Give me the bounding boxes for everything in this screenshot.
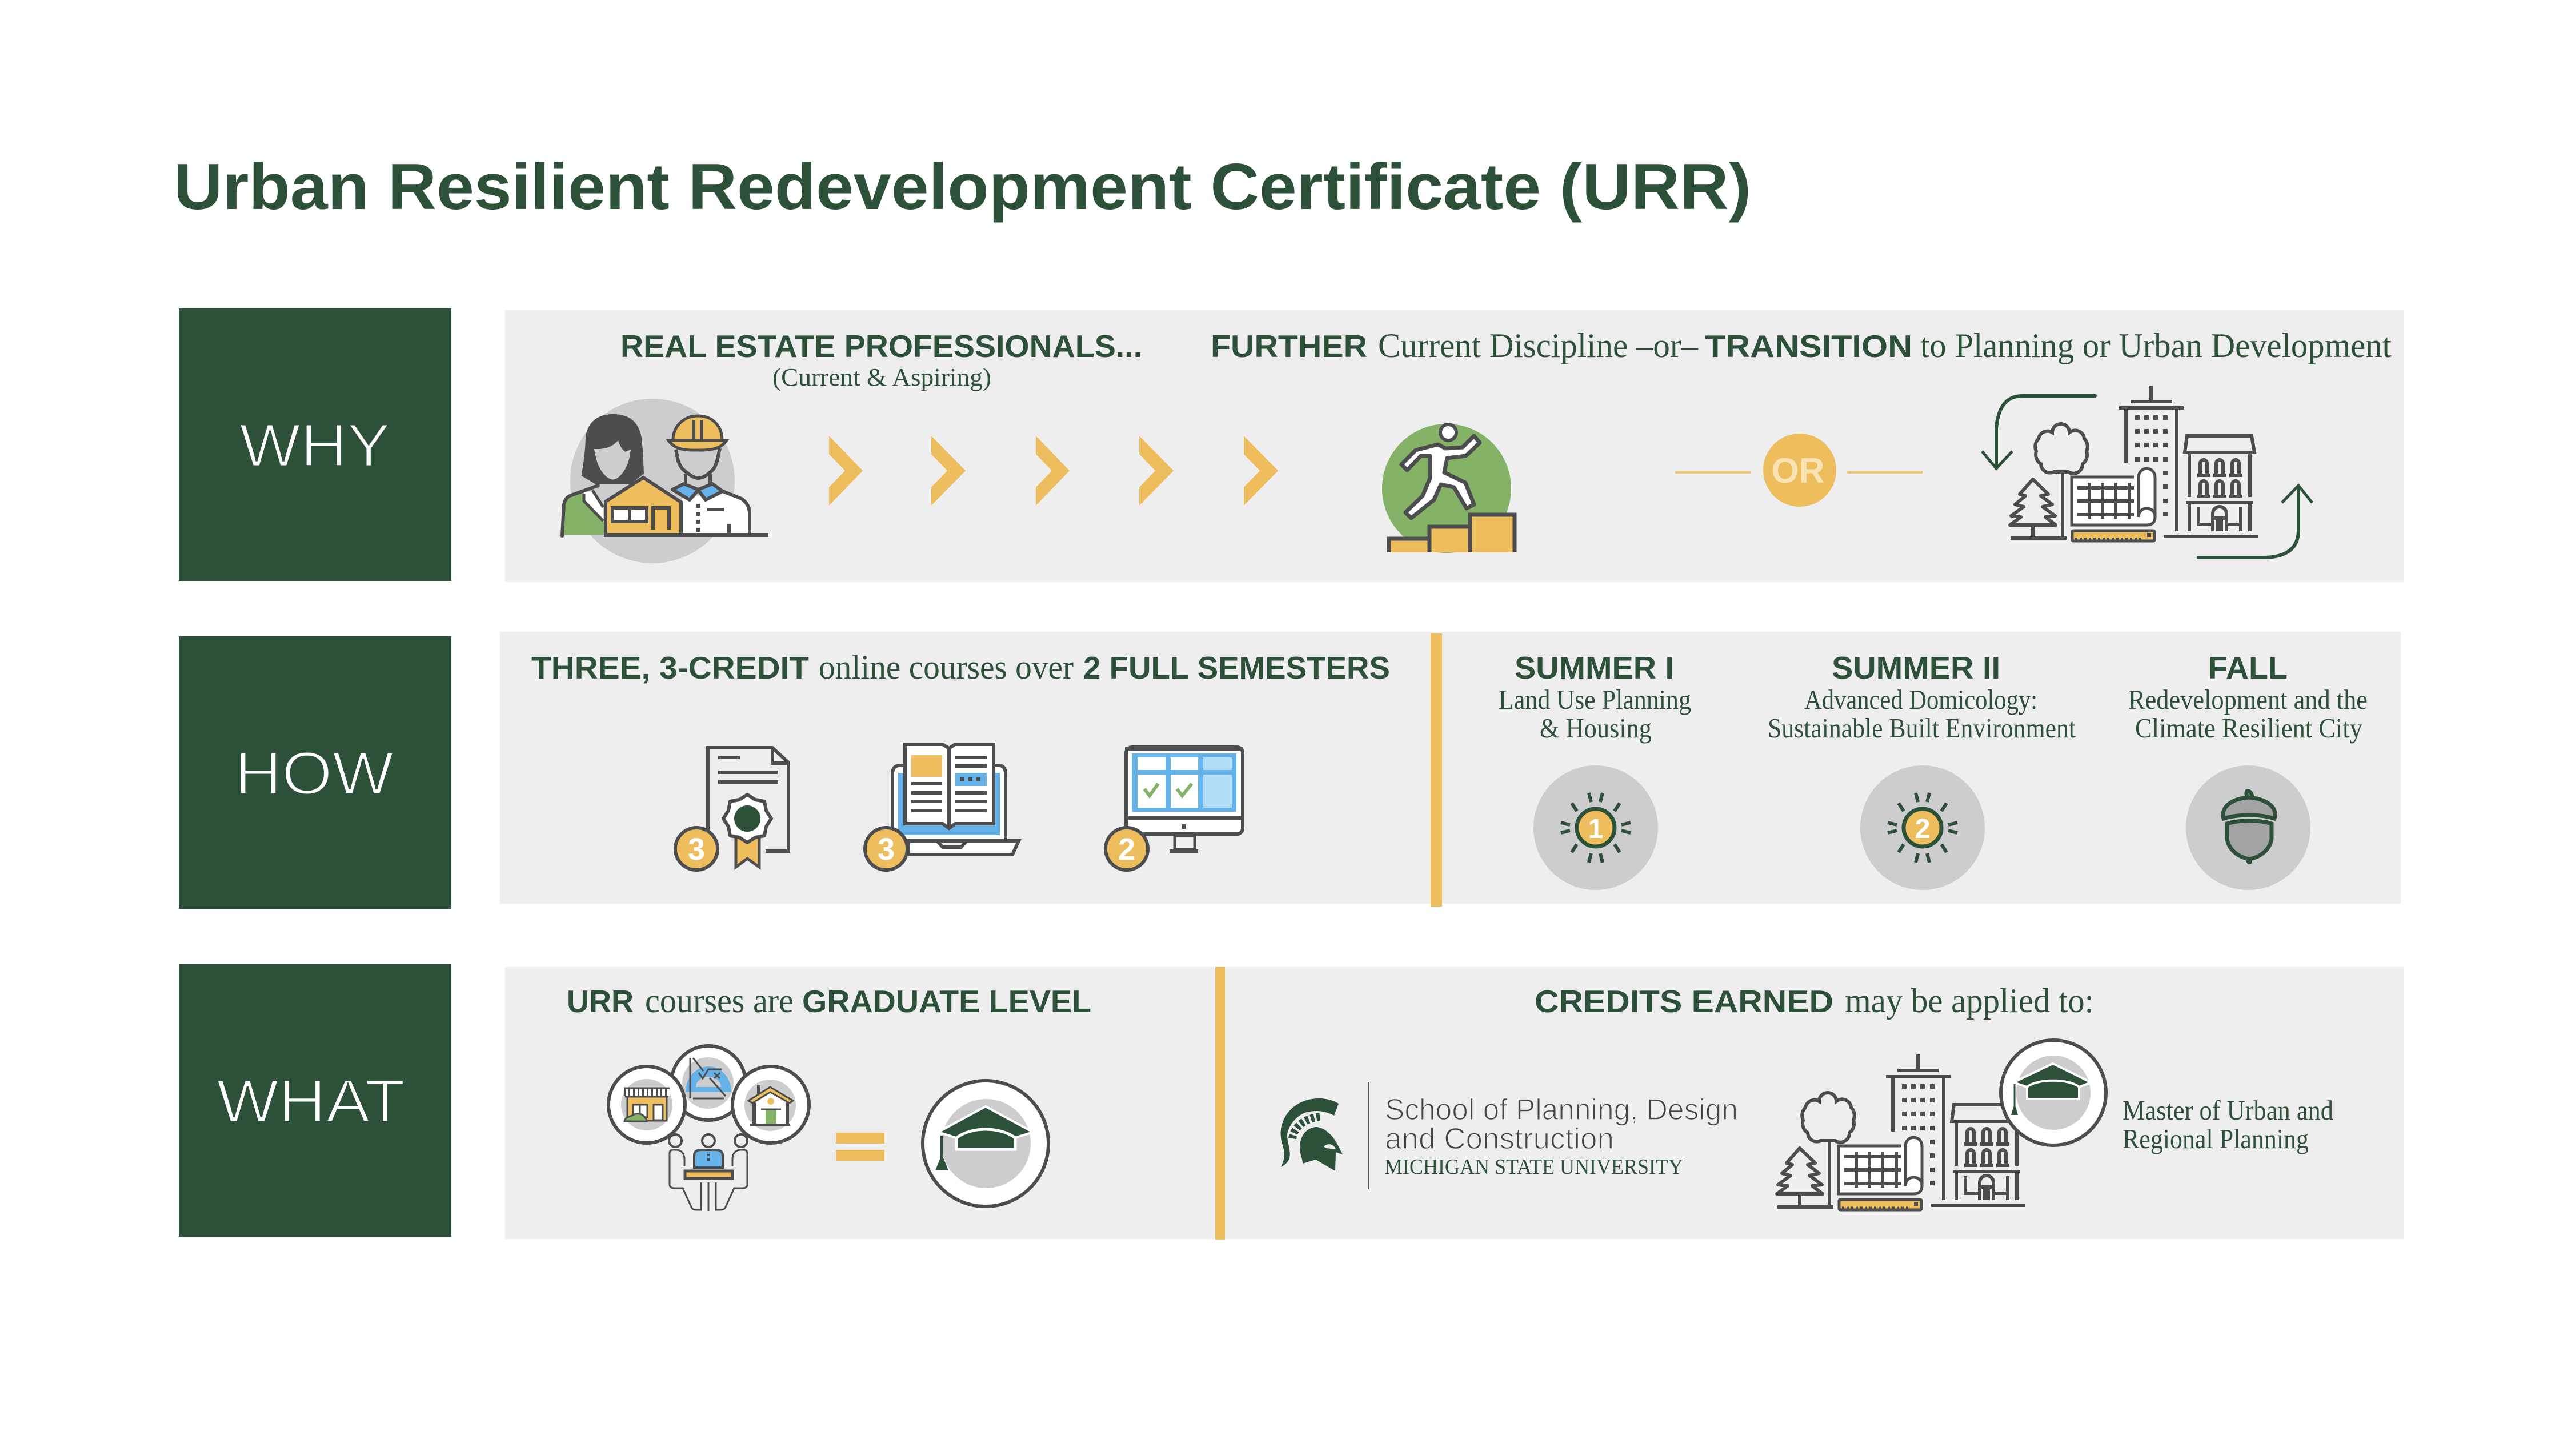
equals sign (836, 1133, 884, 1161)
icon: city with graduation cap (1777, 1040, 2106, 1210)
math bubble content (686, 1058, 731, 1098)
icon: monitor with checklist (1106, 747, 1243, 870)
column: fall: Redevelopment and the (2128, 684, 2368, 715)
label block: HOW (179, 636, 451, 909)
label block: WHY: WHY (239, 412, 390, 479)
icon: professionals with house (562, 399, 768, 563)
heading: real estate professionals: REAL ESTATE PROFESSIONALS... (620, 328, 1142, 364)
text: school name: and Construction (1385, 1122, 1614, 1156)
icon: laptop with open book: 3 (878, 832, 895, 867)
column: fall: Climate Resilient City (2135, 712, 2362, 744)
heading: graduate level: URR (567, 984, 634, 1019)
or divider: OR (1771, 451, 1825, 491)
heading: graduate level: GRADUATE LEVEL (802, 984, 1091, 1019)
heading: further or transition: FURTHER (1211, 328, 1367, 364)
icon: sun 2: 2 (1915, 814, 1930, 844)
heading: course load: THREE, 3-CREDIT (531, 650, 809, 685)
heading: graduate level (567, 982, 1091, 1020)
arrows: five chevrons (829, 436, 1278, 506)
heading: further or transition: to Planning or Urban Development (1920, 327, 2392, 364)
icon: laptop with open book (865, 744, 1019, 870)
heading: further or transition: TRANSITION (1705, 328, 1912, 364)
house bubble content (748, 1085, 793, 1126)
label block: HOW: HOW (235, 740, 394, 807)
text: master degree: Master of Urban and (2123, 1094, 2333, 1126)
label block: WHY (179, 308, 451, 581)
column: fall (2128, 650, 2368, 890)
column: fall: FALL (2208, 650, 2288, 685)
column: summer I (1499, 650, 1691, 890)
label block: WHAT: WHAT (217, 1068, 405, 1135)
logo: spartan helmet (1280, 1098, 1343, 1171)
text: school name: MICHIGAN STATE UNIVERSITY (1384, 1155, 1683, 1179)
icon: students with idea bubbles (608, 1046, 809, 1211)
icon: sun 1: 1 (1588, 814, 1603, 844)
panel: what (505, 967, 2404, 1240)
heading: credits earned (1535, 982, 2094, 1020)
gold divider (1215, 967, 1225, 1240)
icon: monitor with checklist: 2 (1118, 832, 1135, 867)
text: master degree (2123, 1094, 2333, 1154)
icon: sun 1 (1561, 793, 1631, 863)
column: summer II: Sustainable Built Environment (1768, 712, 2076, 744)
panel: why (505, 310, 2404, 582)
column: summer I: Land Use Planning (1499, 684, 1691, 715)
text: school name (1384, 1093, 1738, 1179)
icon: city with arrows (1982, 386, 2312, 557)
heading: further or transition: Current Discipline –or– (1378, 327, 1699, 364)
column: summer II: SUMMER II (1832, 650, 2000, 685)
heading: credits earned: CREDITS EARNED (1535, 984, 1833, 1019)
icon: acorn (2223, 791, 2275, 864)
icon: certificate: 3 (688, 832, 705, 867)
column: summer I: & Housing (1540, 712, 1652, 744)
label block: WHAT (179, 964, 451, 1237)
heading: credits earned: may be applied to: (1845, 982, 2094, 1020)
icon: certificate (675, 748, 788, 870)
icon: graduation cap (923, 1081, 1048, 1206)
text: master degree: Regional Planning (2123, 1123, 2309, 1154)
column: summer I: SUMMER I (1515, 650, 1674, 685)
column: summer II: Advanced Domicology: (1804, 684, 2037, 715)
heading: further or transition (1211, 327, 2392, 364)
shop bubble content (624, 1088, 670, 1121)
logo divider (1368, 1082, 1369, 1189)
or divider (1675, 434, 1923, 507)
heading: course load (531, 648, 1390, 686)
panel: how (500, 632, 2401, 907)
heading: course load: 2 FULL SEMESTERS (1083, 650, 1390, 685)
text: school name: School of Planning, Design (1385, 1093, 1738, 1126)
heading: course load: online courses over (819, 648, 1074, 686)
icon: sun 2 (1888, 793, 1957, 863)
icon: runner on steps (1382, 424, 1515, 553)
subheading: current and aspiring: (Current & Aspiring) (772, 363, 991, 391)
gold divider (1431, 633, 1442, 907)
title: Urban Resilient Redevelopment Certificate (URR) (174, 151, 1751, 223)
column: summer II (1768, 650, 2076, 890)
heading: graduate level: courses are (645, 982, 794, 1020)
